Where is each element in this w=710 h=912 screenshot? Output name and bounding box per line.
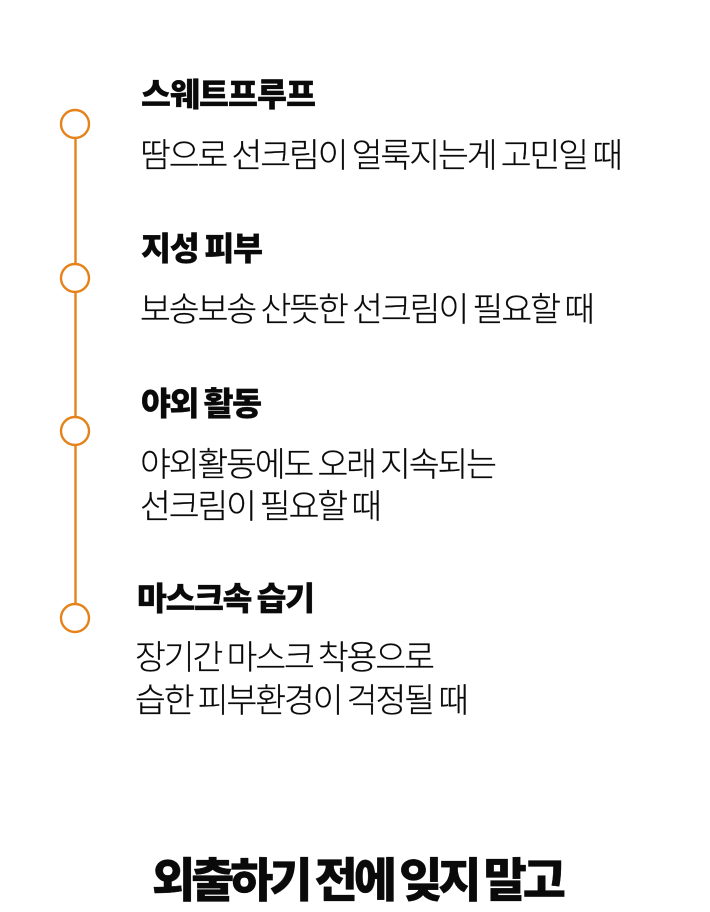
item 3 heading: 야외 활동 — [141, 386, 262, 422]
timeline node 4 — [61, 604, 89, 632]
closing title: 외출하기 전에 잊지 말고 — [152, 854, 566, 907]
timeline node 2 — [61, 264, 89, 292]
timeline — [61, 110, 89, 632]
item 2 description: 보송보송 산뜻한 선크림이 필요할 때 — [140, 292, 595, 329]
item 3 — [140, 386, 497, 526]
item 3 description line 2: 선크림이 필요할 때 — [140, 489, 382, 526]
item 4 — [135, 581, 469, 720]
item 1 description: 땀으로 선크림이 얼룩지는게 고민일 때 — [140, 138, 623, 175]
timeline node 1 — [61, 110, 89, 138]
item 4 heading: 마스크속 습기 — [137, 581, 315, 617]
item 1 heading: 스웨트프루프 — [141, 77, 316, 113]
item 4 description line 2: 습한 피부환경이 걱정될 때 — [135, 683, 469, 720]
item 2 heading: 지성 피부 — [141, 231, 263, 267]
item 2 — [140, 231, 595, 329]
item 1 — [140, 77, 623, 175]
item 3 description line 1: 야외활동에도 오래 지속되는 — [140, 447, 497, 484]
item 4 description line 1: 장기간 마스크 착용으로 — [135, 640, 435, 677]
timeline node 3 — [61, 417, 89, 445]
